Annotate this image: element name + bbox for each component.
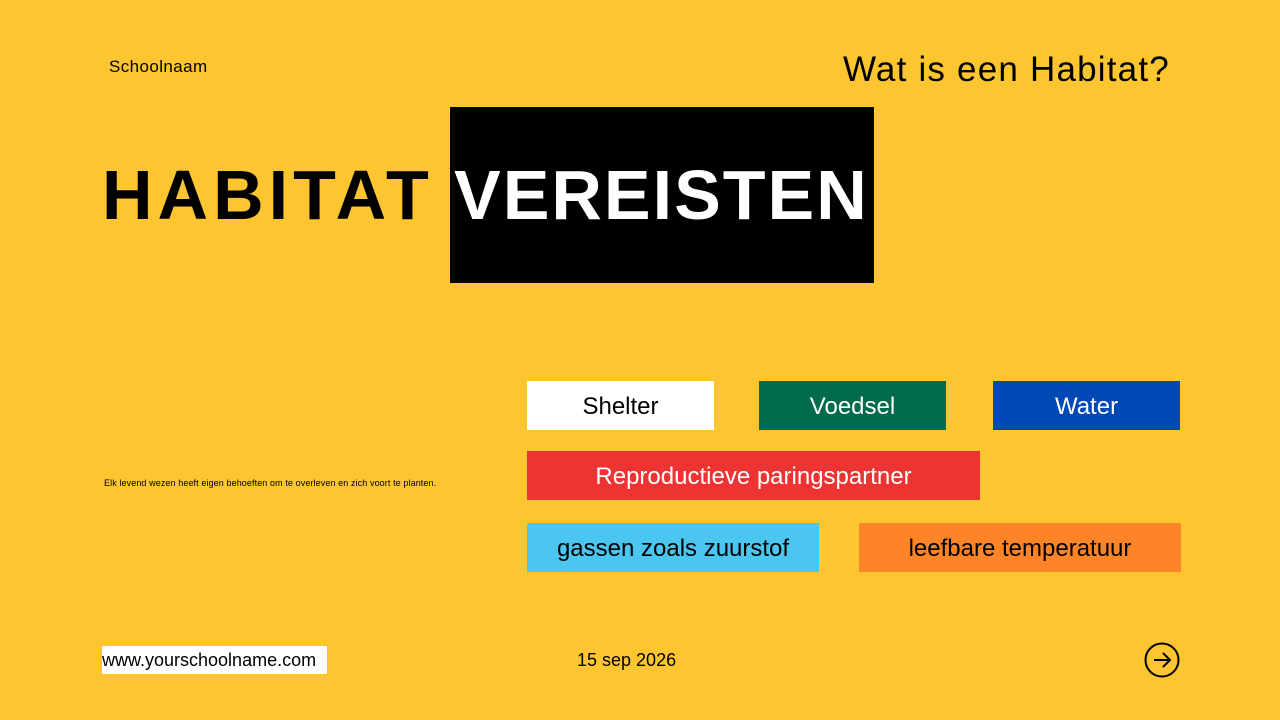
tag: Voedsel [759,381,946,430]
date: 15 sep 2026 [577,650,676,670]
title word: VEREISTEN: VEREISTEN [454,156,869,234]
tag: Water [993,381,1180,430]
school name: Schoolnaam [109,57,208,76]
tag: Reproductieve paringspartner [527,451,980,500]
website: www.yourschoolname.com [102,650,316,670]
icon: arrow circle [1144,642,1180,678]
tag: leefbare temperatuur [859,523,1181,572]
tag: Shelter [527,381,714,430]
tag: gassen zoals zuurstof [527,523,819,572]
tag: gassen zoals zuurstof: gassen zoals zuurstof [557,535,789,562]
tag: leefbare temperatuur: leefbare temperatuur [909,535,1131,562]
tag: Water: Water [1055,393,1118,420]
title word: HABITAT: HABITAT [102,156,434,234]
black title box [450,107,874,283]
description text: Elk levend wezen heeft eigen behoeften om te overleven en zich voort te planten. [104,478,436,488]
tag: Reproductieve paringspartner: Reproductieve paringspartner [595,463,912,490]
tag: Voedsel: Voedsel [810,393,895,420]
question heading: Wat is een Habitat? [843,50,1170,89]
tag: Shelter: Shelter [582,393,659,420]
website [102,646,327,674]
